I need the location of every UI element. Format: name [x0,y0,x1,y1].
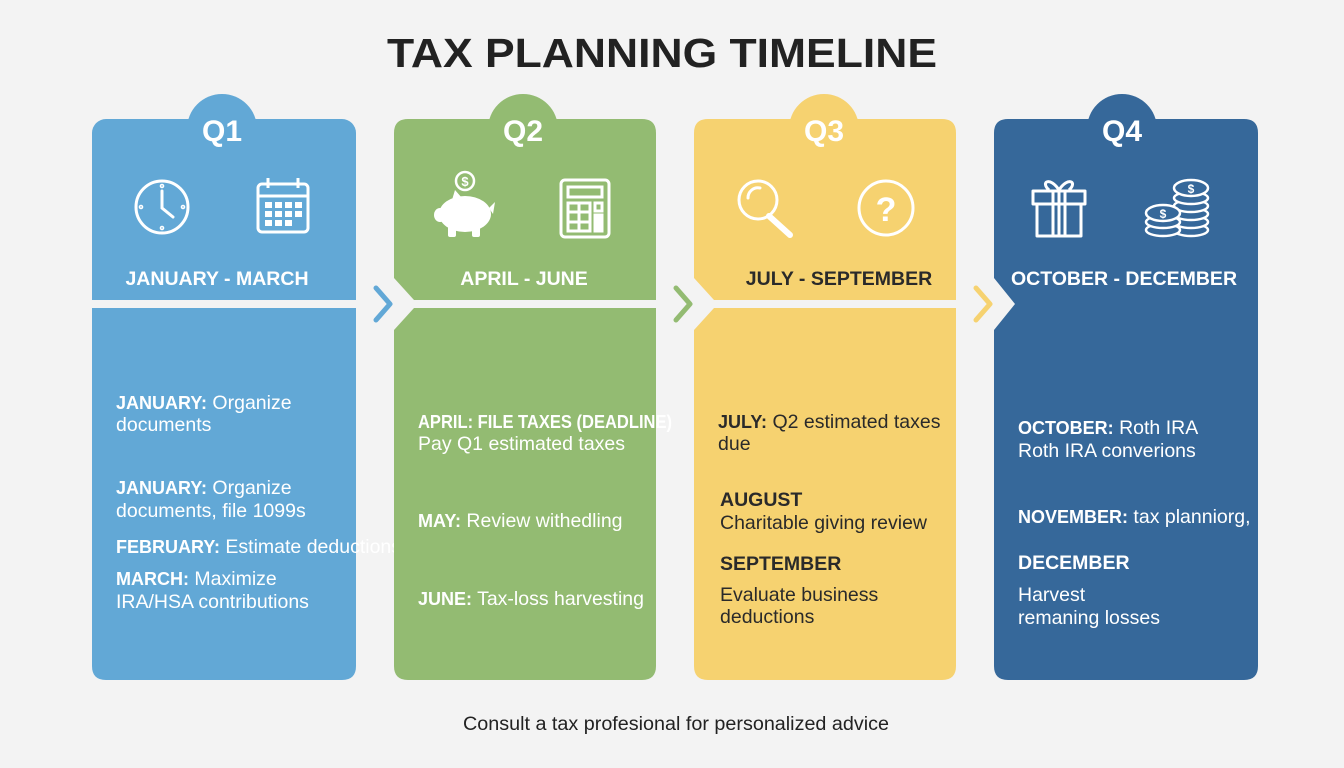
Q3 range: JULY - SEPTEMBER [746,268,932,290]
Q1 items: IRA/HSA contributions [116,591,309,613]
arrow: Q2 to Q3 [676,288,690,320]
Q3 label: Q3 [804,115,844,148]
Q2 items [418,412,672,610]
Q4 label: Q4 [1102,115,1142,148]
Q1 items: JANUARY: Organize [116,392,292,414]
Q1 items: documents, file 1099s [116,500,306,522]
panel: Q4 [994,94,1258,680]
icon: question: ? [876,191,896,229]
Q3 items: SEPTEMBER [720,553,841,575]
icon: piggy bank [434,172,495,237]
icon: gift [1033,182,1085,236]
Q4 items: Harvest [1018,584,1086,606]
Q3 items: JULY: Q2 estimated taxes [718,411,941,433]
icon: magnifier [739,181,790,235]
Q1 items: MARCH: Maximize [116,568,277,590]
icon: calculator [561,180,609,237]
Q1 items: FEBRUARY: Estimate deductions [116,536,401,558]
Q2 items: JUNE: Tax-loss harvesting [418,588,644,610]
Q1 items [116,392,401,613]
Q1 label: Q1 [202,115,242,148]
icon: coins [1146,180,1208,236]
footer note: Consult a tax profesional for personalized advice [463,714,889,735]
panel: Q3 [694,94,956,680]
Q3 items [718,411,941,628]
Q4 items: DECEMBER [1018,552,1130,574]
Q3 items: Evaluate business [720,584,879,606]
Q2 items: MAY: Review withedling [418,510,623,532]
Q4 items [1018,417,1251,629]
arrow: Q3 to Q4 [976,288,990,320]
panel: Q2 [394,94,672,680]
arrow: Q1 to Q2 [376,288,390,320]
Q1 items: JANUARY: Organize [116,477,292,499]
icon: coins: $ [1188,182,1195,196]
Q1 range: JANUARY - MARCH [125,268,309,290]
icon: question [859,181,913,235]
Q3 items: Charitable giving review [720,512,928,534]
Q3 items: AUGUST [720,489,802,511]
Q4 items: OCTOBER: Roth IRA [1018,417,1198,439]
Q2 items: Pay Q1 estimated taxes [418,433,625,455]
Q4 items: NOVEMBER: tax planniorg, [1018,506,1251,528]
Q4 items: remaning losses [1018,607,1160,629]
panel: Q1 [92,94,401,680]
icon: calendar [258,178,308,232]
Q3 items: deductions [720,606,815,628]
Q3 items: due [718,433,751,455]
Q2 label: Q2 [503,115,543,148]
Q4 items: Roth IRA converions [1018,440,1196,462]
icon: clock [136,181,188,233]
Q4 range: OCTOBER - DECEMBER [1011,268,1237,290]
icon: coins: $ [1160,207,1167,221]
Q2 range: APRIL - JUNE [460,268,588,290]
Q1 items: documents [116,414,212,436]
title: TAX PLANNING TIMELINE [387,30,937,76]
icon: piggy bank: $ [461,174,469,189]
Q2 items: APRIL: FILE TAXES (DEADLINE) [418,412,672,432]
